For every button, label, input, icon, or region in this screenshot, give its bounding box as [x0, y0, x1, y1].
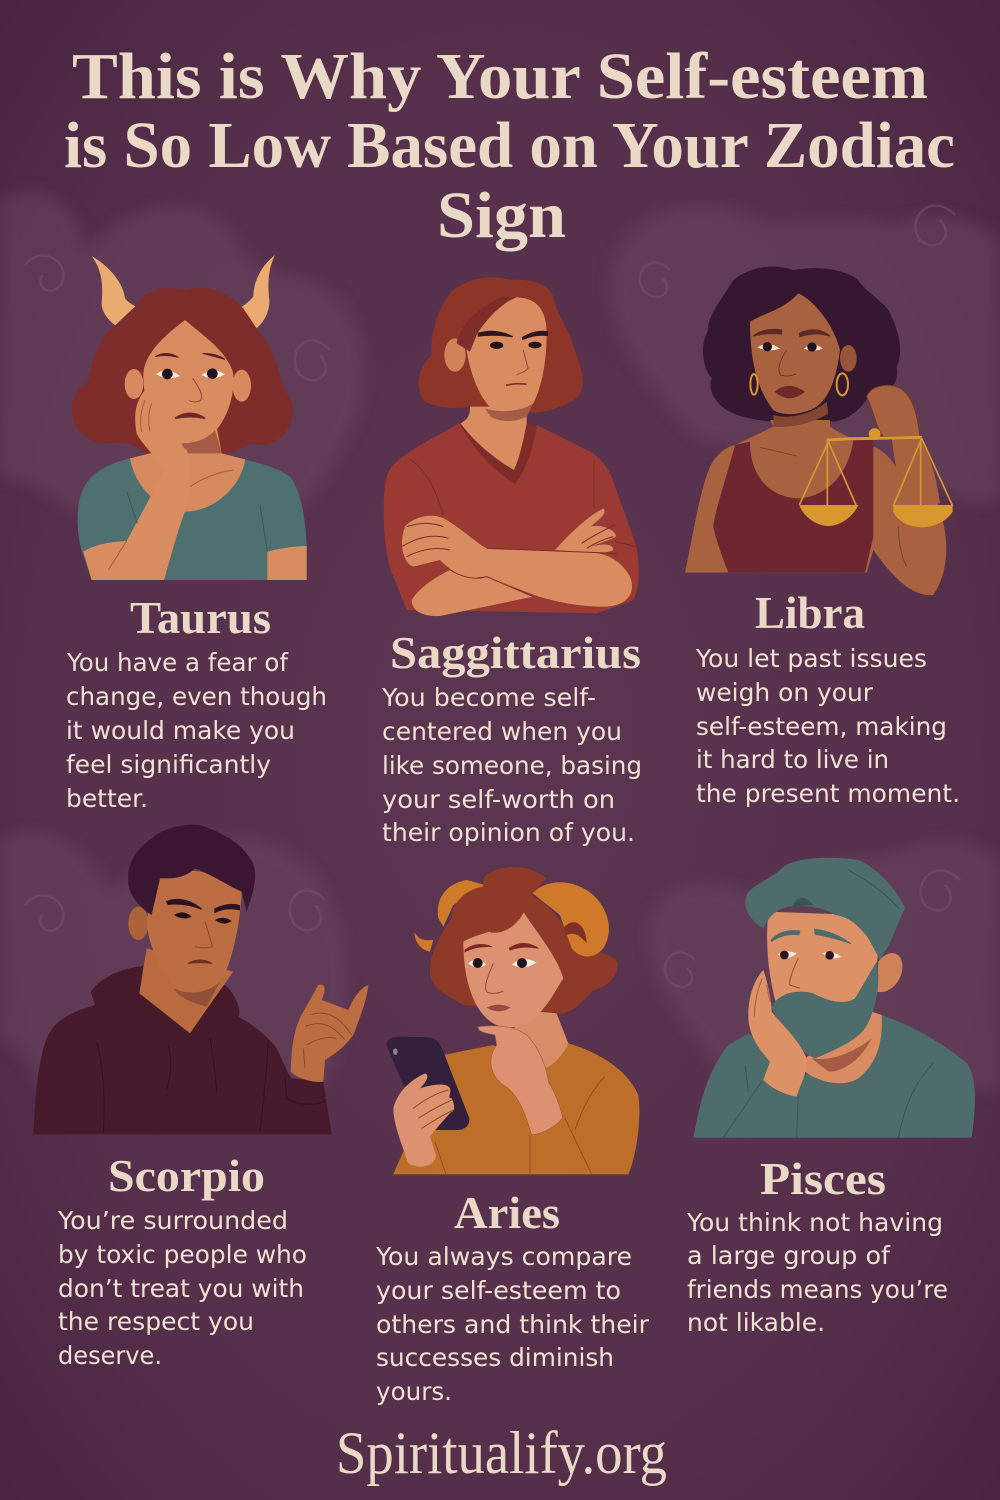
heading: Saggittarius: Saggittarius: [390, 628, 641, 678]
text: Pisces description: friends means you’re: [687, 1275, 948, 1304]
title: [64, 40, 955, 252]
panel: Saggittarius: [381, 277, 642, 847]
text: Scorpio description: by toxic people who: [58, 1240, 307, 1269]
text: Saggittarius description: their opinion of you.: [382, 818, 635, 847]
text: Taurus description: You have a fear of: [66, 648, 289, 677]
heading: Libra: Libra: [755, 588, 865, 638]
illustration: Scorpio man in hoodie: [33, 825, 368, 1134]
text: Scorpio description: deserve.: [58, 1341, 162, 1370]
text: Libra description: [695, 644, 960, 808]
text: Pisces description: not likable.: [687, 1308, 825, 1337]
text: Pisces description: You think not having: [686, 1208, 943, 1237]
panel: Taurus: [66, 255, 327, 813]
text: Libra description: weigh on your: [696, 678, 874, 707]
text: Aries description: your self-esteem to: [376, 1276, 621, 1305]
smoke clouds: [0, 192, 1000, 1102]
text: Saggittarius description: You become self-: [381, 683, 596, 712]
text: Taurus description: feel significantly: [66, 750, 271, 779]
icon: gold scales: [799, 429, 953, 527]
panel: Scorpio: [33, 825, 368, 1370]
text: Pisces description: a large group of: [687, 1241, 891, 1270]
text: Taurus description: change, even though: [66, 682, 327, 711]
text: Scorpio description: don’t treat you with: [58, 1274, 304, 1303]
illustration: Aries woman with phone: [387, 867, 639, 1174]
text: Libra description: You let past issues: [695, 644, 927, 673]
illustration: Taurus woman with horns: [72, 255, 307, 580]
text: Libra description: it hard to live in: [696, 745, 889, 774]
smoke swirls: [25, 205, 960, 987]
text: Saggittarius description: centered when you: [382, 717, 622, 746]
heading: Aries: Aries: [454, 1188, 560, 1238]
text: Saggittarius description: your self-worth on: [382, 785, 615, 814]
text: Taurus description: [66, 648, 327, 813]
text: Saggittarius description: [381, 683, 642, 847]
title: This is Why Your Self-esteem: [72, 40, 928, 113]
panel: Aries: [375, 867, 650, 1406]
text: Saggittarius description: like someone, basing: [382, 751, 642, 780]
panel: Pisces: [686, 858, 975, 1337]
text: Taurus description: it would make you: [66, 716, 295, 745]
footer: site name: Spiritualify.org: [336, 1420, 667, 1486]
text: Aries description: successes diminish: [376, 1343, 614, 1372]
heading: Scorpio: Scorpio: [108, 1151, 265, 1201]
text: Scorpio description: You’re surrounded: [57, 1206, 288, 1235]
text: Scorpio description: [57, 1206, 307, 1370]
text: Aries description: [375, 1242, 650, 1406]
text: Aries description: yours.: [376, 1377, 452, 1406]
text: Libra description: the present moment.: [696, 779, 960, 808]
text: Scorpio description: the respect you: [58, 1307, 254, 1336]
heading: Pisces: Pisces: [760, 1154, 886, 1204]
icon: phone: [387, 1037, 469, 1130]
title: Sign: [437, 179, 566, 252]
text: Pisces description: [686, 1208, 948, 1337]
heading: Taurus: Taurus: [130, 593, 271, 643]
illustration: Pisces bearded man: [693, 858, 975, 1138]
panel: Libra: [685, 267, 960, 808]
title: is So Low Based on Your Zodiac: [64, 109, 955, 182]
text: Taurus description: better.: [66, 784, 148, 813]
illustration: Saggittarius person with crossed arms: [384, 277, 639, 616]
text: Libra description: self-esteem, making: [696, 712, 947, 741]
text: Aries description: others and think their: [376, 1310, 650, 1339]
text: Aries description: You always compare: [375, 1242, 632, 1271]
illustration: Libra woman with scales: [685, 267, 953, 595]
